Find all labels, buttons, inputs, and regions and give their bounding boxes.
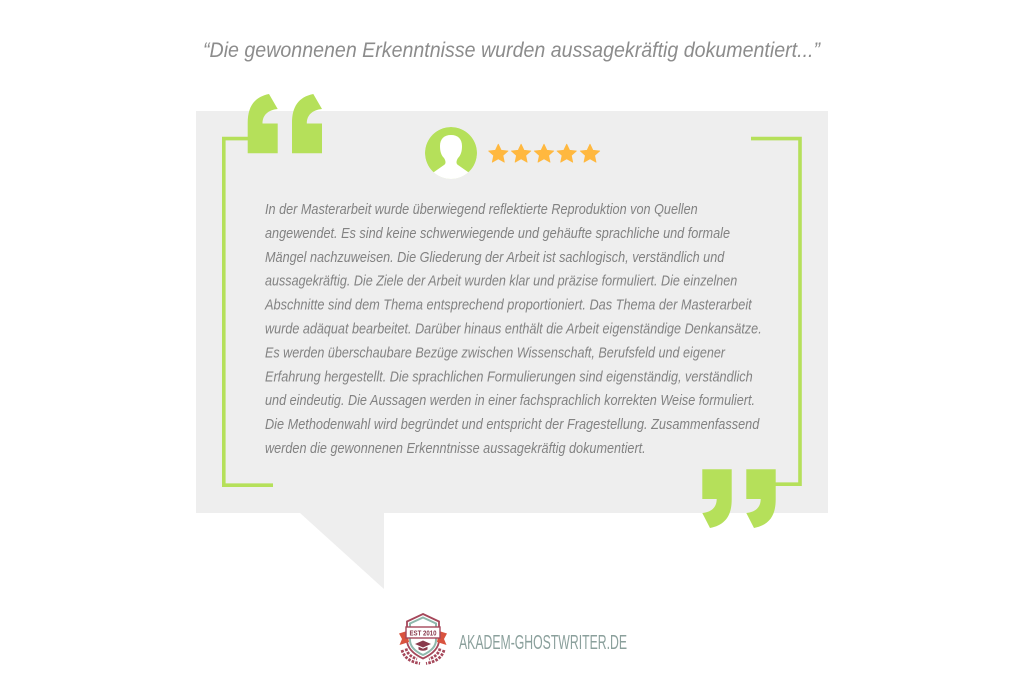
green frame right	[751, 139, 800, 484]
review text: werden die gewonnenen Erkenntnisse aussagekräftig dokumentiert.	[265, 441, 646, 457]
badge year text: EST 2010	[410, 630, 437, 638]
review text: und eindeutig. Die Aussagen werden in einer fachsprachlich korrekten Weise formuliert.	[265, 393, 755, 409]
icon: closing quote mark	[702, 469, 776, 528]
badge graduation cap	[415, 640, 431, 651]
green frame left	[224, 139, 273, 485]
badge inner shield	[410, 618, 436, 655]
review text: angewendet. Es sind keine schwerwiegende und gehäufte sprachliche und formale	[265, 226, 730, 242]
review text: Abschnitte sind dem Thema entsprechend proportioniert. Das Thema der Masterarbeit	[264, 298, 753, 314]
icon: avatar	[425, 127, 477, 180]
review text	[264, 202, 762, 457]
review text: Es werden überschaubare Bezüge zwischen Wissenschaft, Berufsfeld und eigener	[265, 345, 726, 361]
review text: In der Masterarbeit wurde überwiegend reflektierte Reproduktion von Quellen	[265, 202, 698, 218]
review text: Mängel nachzuweisen. Die Gliederung der Arbeit ist sachlogisch, verständlich und	[265, 250, 725, 266]
badge shield	[407, 614, 439, 658]
icon: five star rating	[489, 144, 600, 162]
logo text: AKADEM-GHOSTWRITER.DE	[459, 631, 627, 654]
title: “Die gewonnenen Erkenntnisse wurden aussagekräftig dokumentiert...”	[203, 38, 821, 62]
review text: Erfahrung hergestellt. Die sprachlichen Formulierungen sind eigenständig, verständlich	[265, 369, 753, 385]
badge ribbon tails	[399, 631, 447, 645]
review text: aussagekräftig. Die Ziele der Arbeit wurden klar und präzise formuliert. Die einzelnen	[265, 274, 737, 290]
badge banner	[406, 627, 440, 638]
review text: wurde adäquat bearbeitet. Darüber hinaus enthält die Arbeit eigenständige Denkansätze.	[265, 322, 762, 338]
icon: opening quote mark	[248, 94, 322, 153]
review text: Die Methodenwahl wird begründet und entspricht der Fragestellung. Zusammenfassend	[265, 417, 760, 433]
badge laurels	[402, 648, 444, 664]
icon: logo badge	[399, 614, 447, 664]
panel: speech bubble	[196, 111, 828, 589]
